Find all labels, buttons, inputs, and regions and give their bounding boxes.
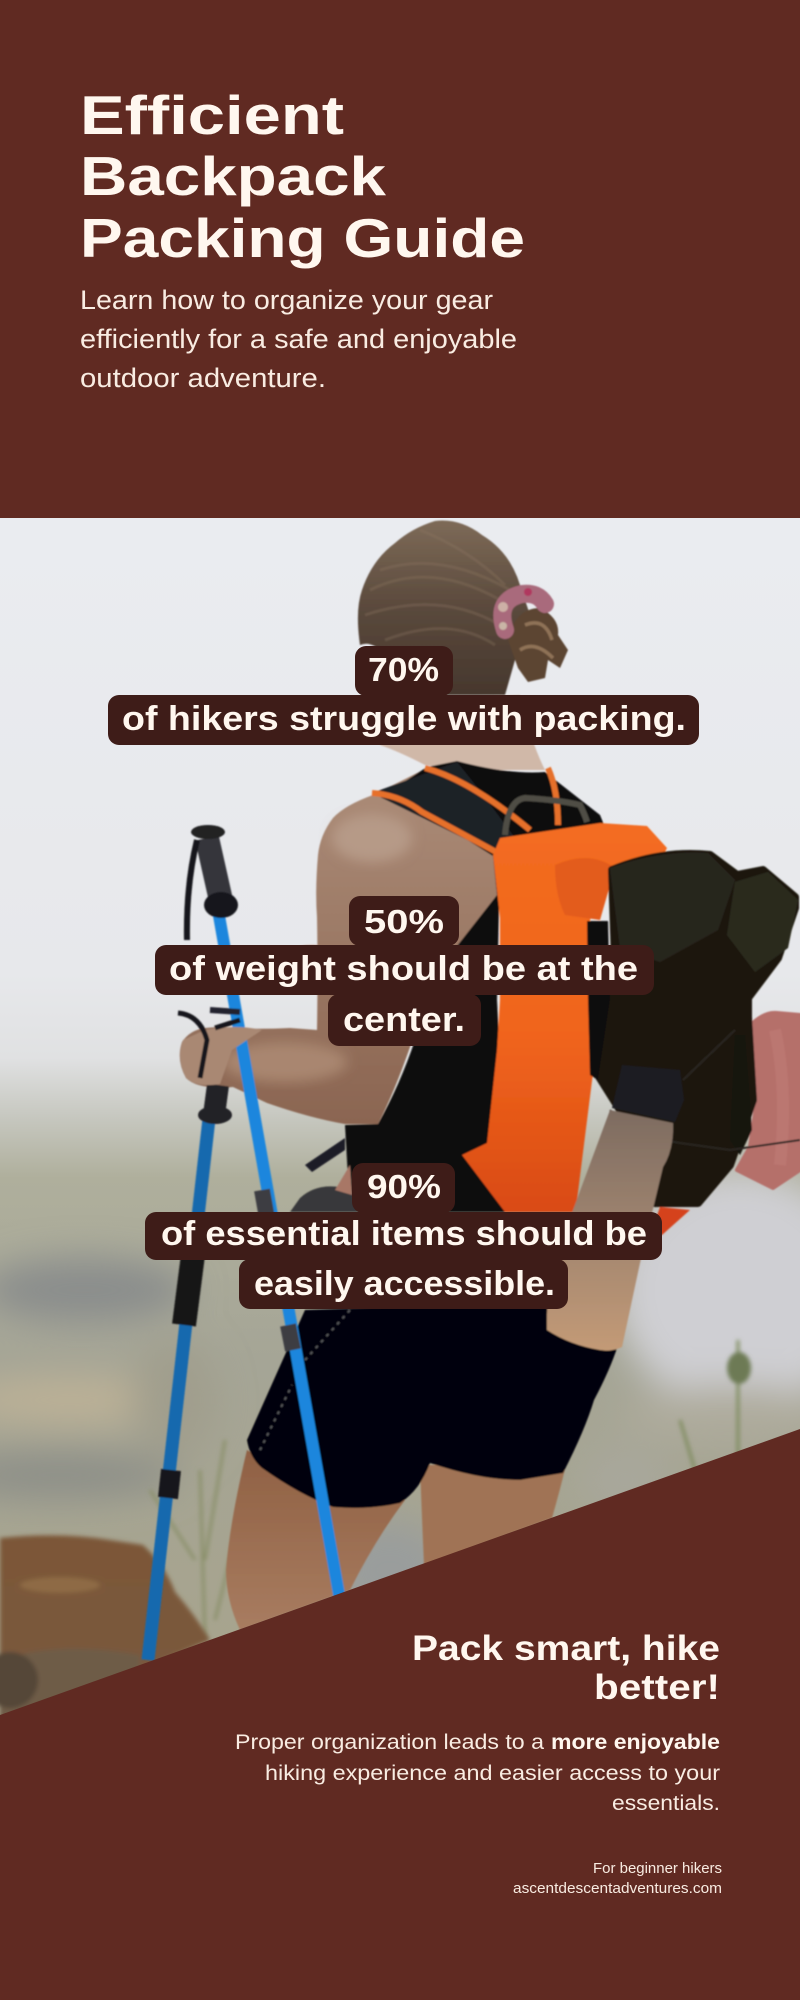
- stat callout: 50%: of weight should be at the: [169, 950, 638, 988]
- stat callout: 70%: of hikers struggle with packing.: [122, 700, 686, 738]
- shorts: [247, 1300, 620, 1508]
- stat callout: 50%: center.: [343, 1001, 465, 1039]
- dark mesh strap: [372, 762, 515, 852]
- title: Efficient: [80, 84, 344, 146]
- forearm highlight: [223, 1042, 347, 1082]
- neck: [380, 695, 545, 770]
- front blue shaft: [148, 1110, 210, 1660]
- closing heading: [412, 1629, 720, 1707]
- photo: hiker with backpack: [0, 518, 800, 1722]
- subtitle: Learn how to organize your gear: [80, 285, 493, 315]
- red lower pack piece: [650, 1207, 690, 1235]
- stat callout: 50%: 50%: [364, 903, 444, 940]
- elastic cord: [610, 1030, 800, 1150]
- footer credits: For beginner hikers: [593, 1861, 722, 1877]
- subtitle: outdoor adventure.: [80, 363, 326, 393]
- rear grip cap: [191, 825, 225, 839]
- scrunchie pattern: [498, 588, 532, 630]
- stat callout: 90%: of essential items should be: [161, 1215, 647, 1253]
- misty sky and valley background: [0, 518, 800, 1718]
- rear grip flange: [204, 892, 238, 918]
- shoulder and arm: [180, 768, 497, 1124]
- ear: [390, 630, 405, 650]
- wrist strap: [178, 1013, 240, 1078]
- pole strap: [187, 840, 197, 940]
- waist bag: [290, 1186, 360, 1212]
- blurred hills: [0, 1170, 800, 1620]
- trekking pole, rear: [187, 825, 340, 1600]
- pink stuff sack: [737, 1013, 800, 1188]
- dark rolled bag: [598, 854, 795, 1203]
- stat callout: 70%: [108, 646, 699, 745]
- stat callout: 90%: 90%: [367, 1168, 441, 1205]
- fingers behind arm: [275, 945, 318, 969]
- waist strap: [305, 1138, 345, 1172]
- title: Backpack: [80, 145, 386, 207]
- closing paragraph: hiking experience and easier access to your: [265, 1762, 720, 1785]
- stuff sack highlight: [775, 1030, 783, 1165]
- closing heading: Pack smart, hike: [412, 1629, 720, 1668]
- scrunchie: [502, 594, 545, 630]
- bun strands: [520, 623, 553, 658]
- highlight on shoulder: [332, 814, 412, 862]
- stat callout: 50%: [155, 896, 654, 1046]
- upper pole collar: [210, 1010, 240, 1012]
- front pole flange: [198, 1106, 232, 1124]
- legs: [226, 1450, 405, 1630]
- title: Packing Guide: [80, 207, 525, 269]
- subtitle: [80, 285, 517, 393]
- subtitle: efficiently for a safe and enjoyable: [80, 324, 517, 354]
- grass: [150, 1340, 751, 1640]
- diagonal footer panel: [0, 1429, 800, 2000]
- closing paragraph: [235, 1731, 720, 1815]
- front pole foam grip: [184, 1255, 193, 1325]
- orange pack: [462, 823, 667, 1212]
- header background: [0, 0, 800, 518]
- rock: [0, 1535, 210, 1722]
- front pole ring: [168, 1470, 171, 1498]
- stat callout: 90%: [145, 1163, 662, 1309]
- bottle lid: [612, 1065, 684, 1122]
- pack hip: [335, 1165, 352, 1195]
- hiker figure: [148, 521, 800, 1660]
- shorts side lettering: [260, 1310, 350, 1450]
- hand on pole: [180, 1027, 262, 1085]
- rear grip: [207, 838, 222, 905]
- closing paragraph: Proper organization leads to a: [235, 1731, 544, 1754]
- trekking pole, front: [148, 1085, 232, 1660]
- black tank top: [345, 761, 610, 1212]
- footer credits: [513, 1861, 722, 1897]
- rolled hood second fold: [727, 872, 798, 972]
- closing paragraph: essentials.: [612, 1792, 720, 1815]
- hair: [358, 521, 530, 695]
- black back strap: [587, 921, 610, 1080]
- rear blue shaft: [218, 910, 340, 1600]
- hair bun: [508, 608, 568, 682]
- closing heading: better!: [594, 1668, 720, 1707]
- stat callout: 90%: easily accessible.: [254, 1265, 555, 1303]
- pack handle: [505, 798, 587, 835]
- rear shaft collar: [262, 1190, 293, 1350]
- expedition logo strip: [737, 1116, 753, 1156]
- stat callout: 70%: 70%: [368, 651, 439, 688]
- orange shoulder straps: [372, 768, 558, 852]
- water bottle: [547, 1110, 673, 1351]
- pack fold shade: [555, 858, 615, 920]
- title: [80, 84, 525, 269]
- hair strands: [365, 545, 508, 646]
- footer credits: ascentdescentadventures.com: [513, 1881, 722, 1897]
- rolled hood shading: [610, 853, 735, 962]
- closing paragraph: more enjoyable: [551, 1731, 720, 1754]
- front pole handle under hand: [214, 1085, 218, 1115]
